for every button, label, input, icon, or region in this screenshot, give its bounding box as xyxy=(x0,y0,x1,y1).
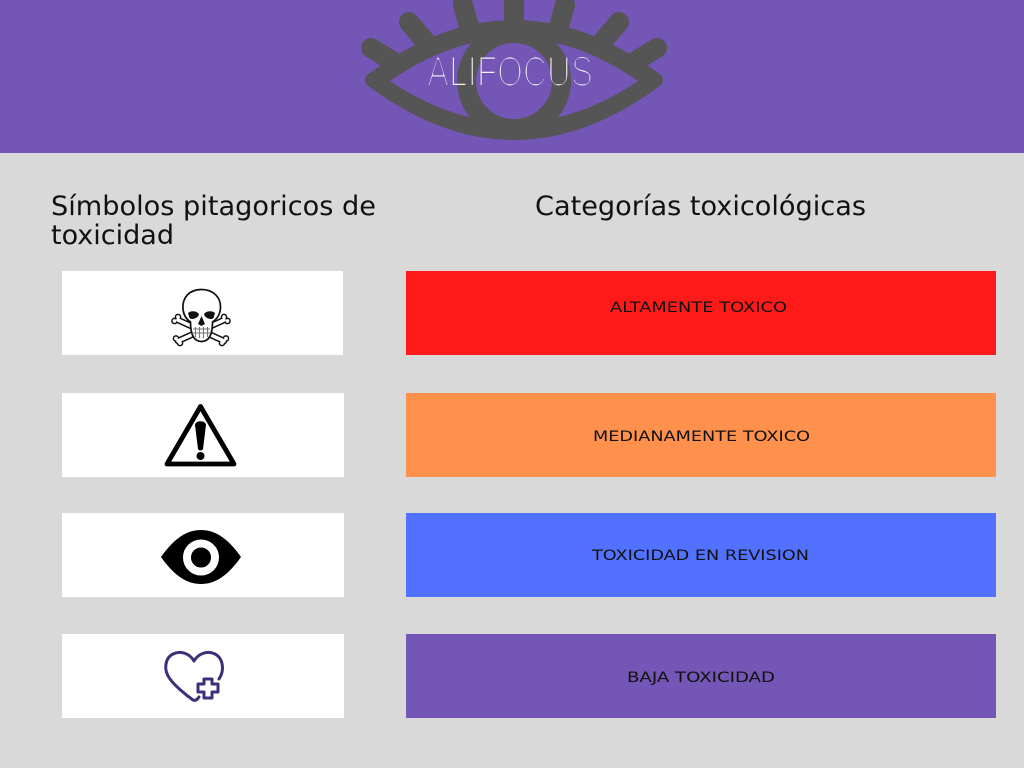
icon: eye xyxy=(161,530,241,584)
icon: skull and crossbones xyxy=(172,290,230,346)
icon: heart with plus xyxy=(166,652,222,700)
category: under review: TOXICIDAD EN REVISION xyxy=(591,548,809,564)
category: high toxicity: ALTAMENTE TOXICO xyxy=(610,300,787,316)
category: low toxicity xyxy=(406,634,996,718)
header banner xyxy=(0,0,1024,153)
heading: categories: Categorías toxicológicas xyxy=(535,191,866,222)
category: medium toxicity xyxy=(406,393,996,477)
category: under review xyxy=(406,513,996,597)
category: low toxicity: BAJA TOXICIDAD xyxy=(627,670,775,686)
panel: heart symbol xyxy=(62,634,344,718)
panel: skull symbol xyxy=(62,271,343,355)
category: medium toxicity: MEDIANAMENTE TOXICO xyxy=(593,429,810,445)
heading: symbols: Símbolos pitagoricos de xyxy=(51,191,376,222)
heading: symbols: toxicidad xyxy=(51,220,174,251)
icon: eye logo xyxy=(371,0,657,133)
brand title: ALIFOCUS xyxy=(427,48,593,96)
category: high toxicity xyxy=(406,271,996,355)
heading: symbols xyxy=(51,191,376,251)
icon: warning triangle xyxy=(167,406,234,464)
panel: eye symbol xyxy=(62,513,344,597)
panel: warning symbol xyxy=(62,393,344,477)
